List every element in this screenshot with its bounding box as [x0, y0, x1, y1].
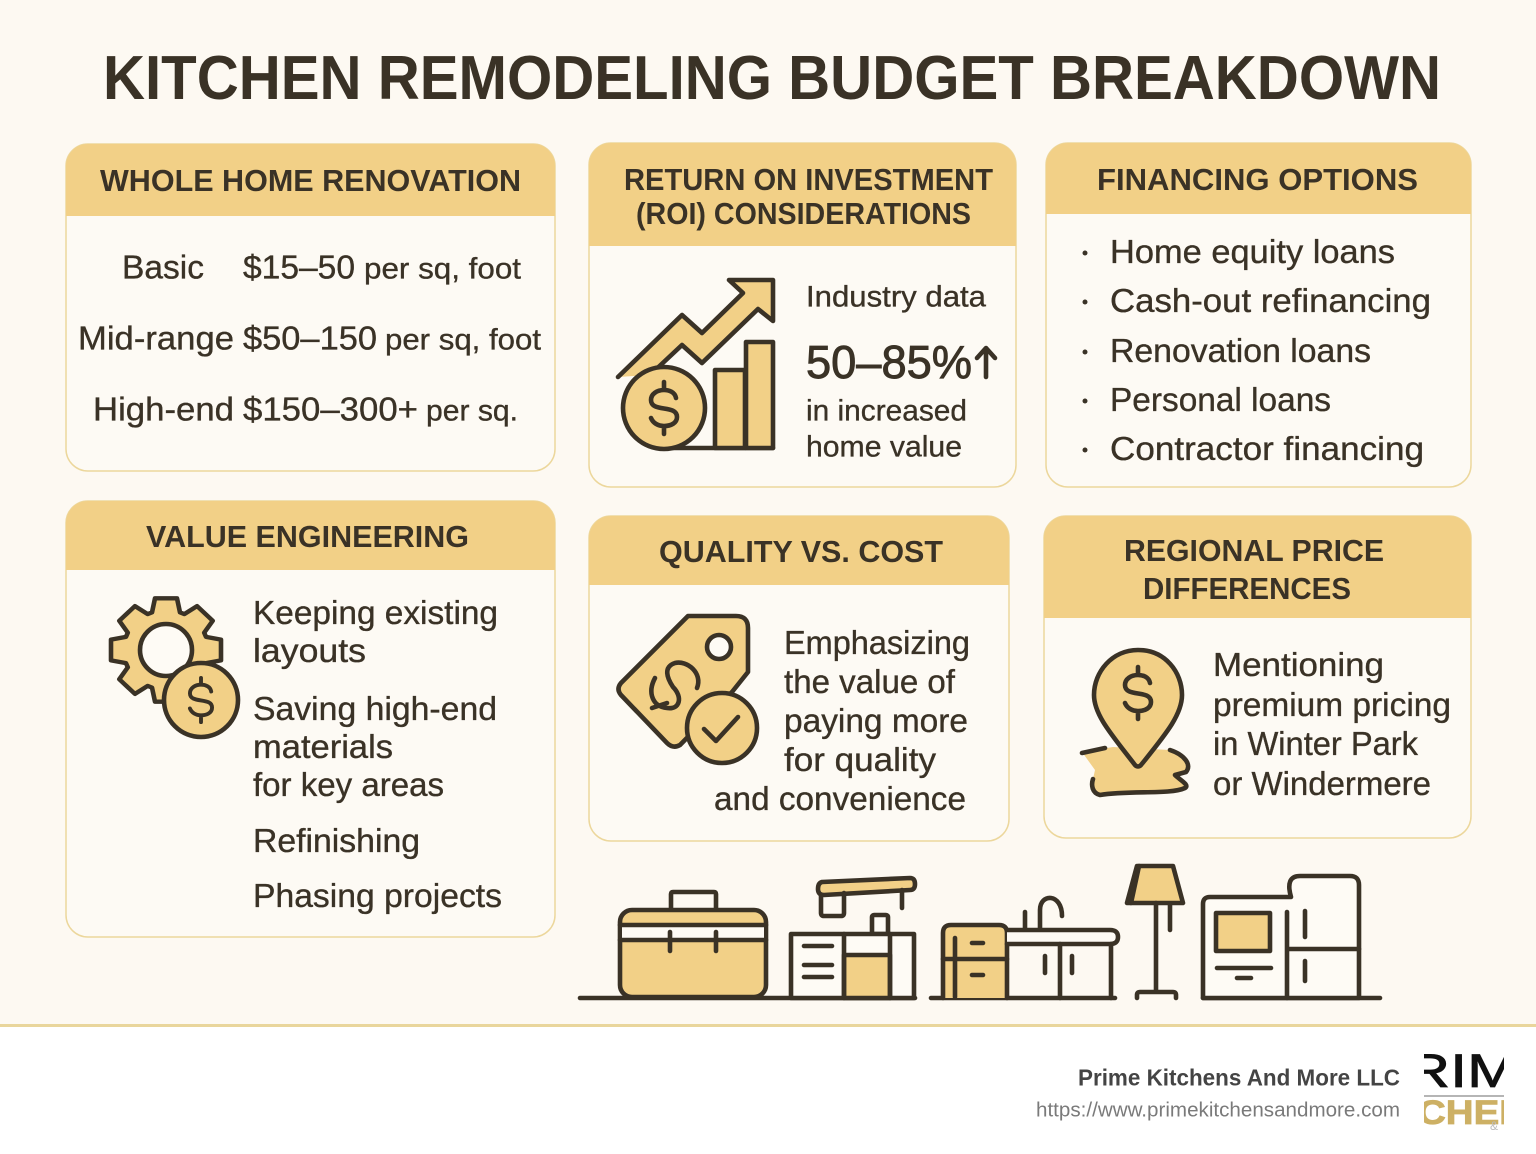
list: financing options: Cash-out refinancing: [1110, 282, 1431, 319]
list: financing options: Personal loans: [1110, 381, 1331, 418]
heading: regional price differences: REGIONAL PRICE: [1124, 533, 1384, 568]
heading: quality vs cost: [589, 516, 1009, 585]
panel: whole home renovation: [66, 144, 555, 471]
text: saving high-end materials: [253, 690, 497, 803]
heading: value engineering: [66, 501, 555, 570]
text: premium pricing: Mentioning: [1213, 646, 1384, 683]
price row: basic: Basic: [122, 248, 204, 286]
text: premium pricing: premium pricing: [1213, 686, 1451, 723]
footer: [0, 1024, 1536, 1154]
list: financing options: [1082, 233, 1431, 467]
panel: financing options: [1046, 143, 1471, 487]
text: premium pricing: in Winter Park: [1213, 725, 1418, 762]
text: emphasizing quality: the value of: [784, 663, 956, 700]
text: saving high-end materials: for key areas: [253, 766, 444, 803]
price row: high-end: per sq.: [426, 394, 518, 428]
text: premium pricing: [1213, 646, 1451, 802]
kitchen illustration: [580, 866, 1380, 998]
panel: value engineering: [66, 501, 555, 937]
text: saving high-end materials: Saving high-end: [253, 690, 497, 727]
text: industry data: Industry data: [806, 280, 986, 314]
text: emphasizing quality: for quality: [784, 741, 937, 778]
heading: roi considerations: (ROI) CONSIDERATIONS: [636, 196, 971, 231]
list: financing options: Contractor financing: [1110, 430, 1424, 467]
heading: whole home renovation: WHOLE HOME RENOVATION: [100, 163, 521, 198]
price row: basic: per sq, foot: [364, 252, 522, 286]
price row: mid-range: [78, 320, 542, 356]
text: premium pricing: or Windermere: [1213, 765, 1431, 802]
company name: Prime Kitchens And More LLC: [1078, 1064, 1400, 1090]
icon: range hood and cabinet: [791, 878, 915, 998]
icon: location pin on map: [1082, 650, 1188, 795]
company url: https://www.primekitchensandmore.com: [1036, 1100, 1400, 1122]
price row: mid-range: $50–150: [243, 320, 377, 356]
heading: regional price differences: DIFFERENCES: [1143, 571, 1351, 606]
text: keeping existing layouts: [253, 594, 498, 669]
panel: regional price differences: [1044, 516, 1471, 838]
icon: floor lines: [580, 996, 1380, 1000]
text: emphasizing quality: paying more: [784, 702, 968, 739]
icon: oven and fridge: [1203, 876, 1359, 998]
text: emphasizing quality: [714, 624, 970, 817]
price row: high-end: High-end: [93, 390, 234, 428]
logo: RIM: [1406, 1044, 1518, 1097]
list: financing options: Home equity loans: [1110, 233, 1395, 270]
text: keeping existing layouts: Keeping existing: [253, 594, 498, 631]
icon: up arrow: [977, 348, 995, 377]
list: financing options: Renovation loans: [1110, 332, 1371, 369]
text: in increased home value: [806, 394, 967, 464]
text: emphasizing quality: Emphasizing: [784, 624, 970, 661]
price row: mid-range: Mid-range: [78, 320, 234, 356]
heading: regional price differences: [1044, 516, 1471, 618]
logo: &: [1490, 1119, 1498, 1133]
text: emphasizing quality: and convenience: [714, 780, 966, 817]
icon: suitcase: [620, 892, 766, 997]
text: refinishing: Refinishing: [253, 822, 420, 859]
price row: high-end: $150–300+: [243, 390, 418, 428]
heading: financing options: FINANCING OPTIONS: [1097, 162, 1418, 197]
text: keeping existing layouts: layouts: [253, 632, 366, 669]
icon: sink cabinet: [943, 898, 1118, 998]
heading: roi considerations: RETURN ON INVESTMENT: [624, 162, 993, 197]
icon: gear with coin: [111, 598, 238, 737]
heading: roi considerations: [589, 143, 1016, 246]
title: KITCHEN REMODELING BUDGET BREAKDOWN: [103, 44, 1441, 113]
icon: price tag with check: [618, 616, 757, 763]
icon: floor lamp: [1127, 866, 1183, 998]
price row: high-end: [93, 390, 518, 428]
text: in increased home value: in increased: [806, 394, 967, 428]
logo: [1424, 1054, 1504, 1130]
heading: value engineering: VALUE ENGINEERING: [146, 519, 469, 554]
price row: basic: [122, 248, 522, 286]
text: phasing projects: Phasing projects: [253, 877, 502, 914]
price row: mid-range: per sq, foot: [385, 324, 542, 356]
panel: quality vs cost: [589, 516, 1009, 841]
text: saving high-end materials: materials: [253, 728, 393, 765]
stat: 50-85 percent: 50–85%: [806, 336, 972, 388]
text: in increased home value: home value: [806, 430, 962, 464]
panel: return on investment: [589, 143, 1016, 487]
heading: financing options: [1046, 143, 1471, 214]
logo: CHEI: [1418, 1094, 1510, 1132]
price row: basic: $15–50: [243, 248, 355, 286]
heading: whole home renovation: [66, 144, 555, 216]
heading: quality vs cost: QUALITY VS. COST: [659, 534, 943, 569]
icon: growth arrow with coin and bars: [618, 280, 773, 449]
